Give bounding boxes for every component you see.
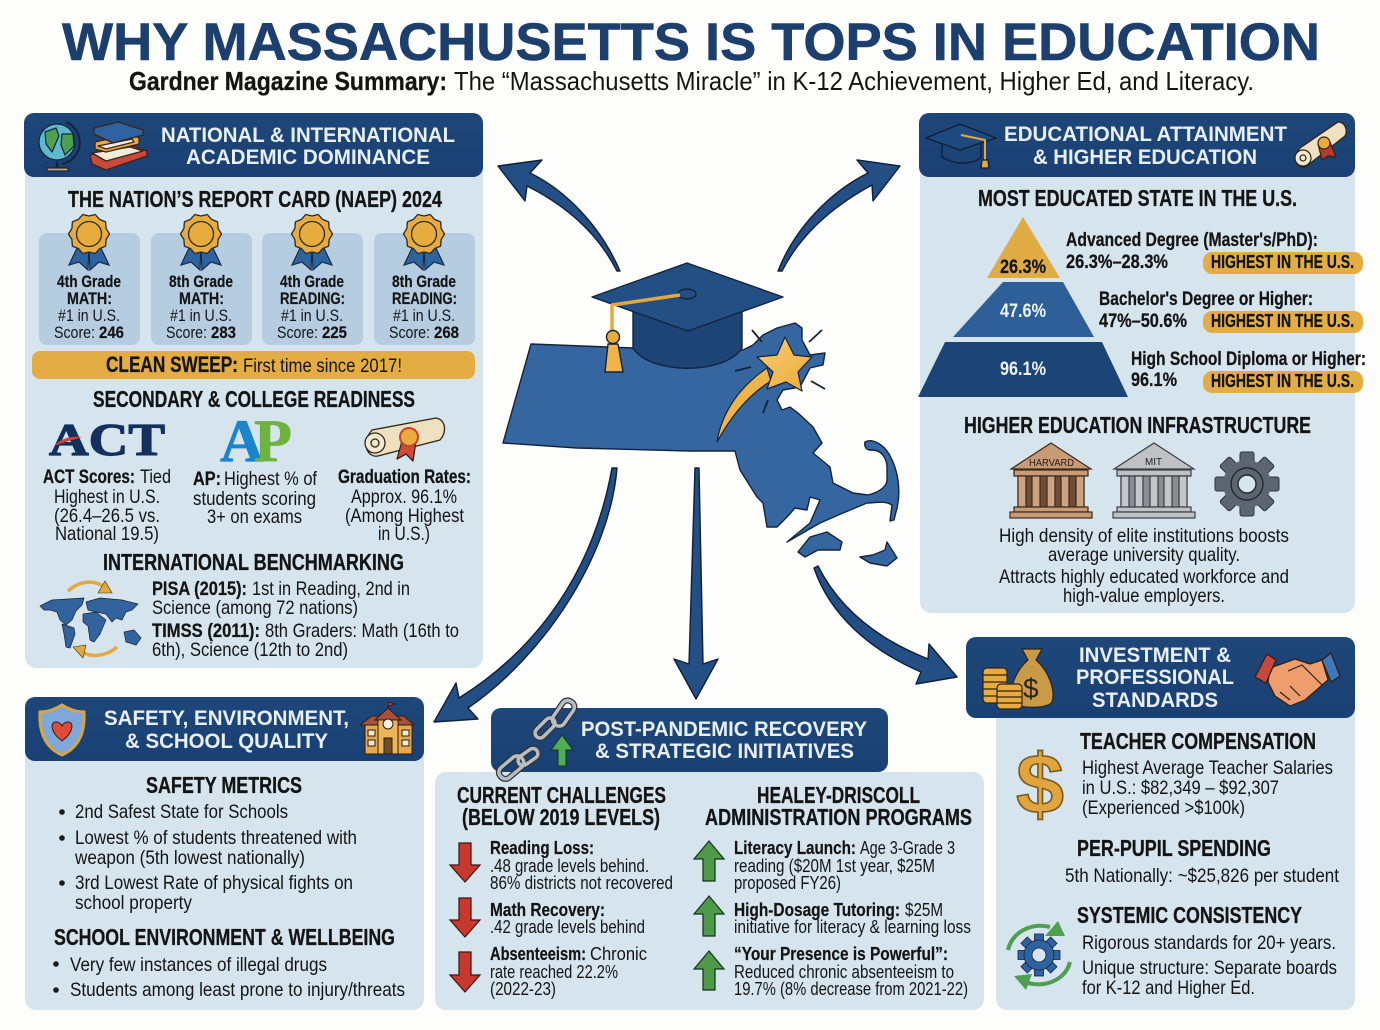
- icon: gold star with tail: [717, 330, 825, 442]
- text: ACT scores: [43, 466, 171, 545]
- text: PISA and TIMSS: Science (among 72 nations): [152, 597, 358, 619]
- panel header: INVESTMENT &: [1079, 644, 1231, 667]
- arrow: literacy launch: [694, 841, 724, 881]
- panel header: [919, 113, 1355, 177]
- label: advanced degree: [1066, 229, 1363, 274]
- block: per-pupil spending: [1065, 835, 1339, 887]
- text: PISA and TIMSS: [152, 578, 459, 661]
- arrow: to national panel: [498, 160, 620, 271]
- text: literacy launch: Age 3-Grade 3: [860, 838, 955, 858]
- label: high school diploma: 96.1%: [1131, 369, 1177, 391]
- arrow: presence: [694, 951, 724, 990]
- list: school environment: Very few instances of illegal drugs: [70, 954, 327, 976]
- callout: clean sweep: CLEAN SWEEP:: [106, 352, 238, 377]
- card: 8th grade reading: #1 in U.S.: [393, 306, 455, 325]
- text: reading loss: Reading Loss:: [490, 838, 594, 858]
- heading: most educated state: MOST EDUCATED STATE IN THE U.S.: [978, 185, 1297, 211]
- card: 8th grade reading: READING:: [392, 289, 457, 308]
- subtitle: [129, 66, 1254, 96]
- text: math recovery: Math Recovery:: [490, 900, 605, 920]
- card: 4th grade math: 4th Grade: [57, 272, 121, 291]
- arrow: to safety panel: [434, 468, 617, 722]
- panel header: [491, 708, 888, 772]
- text: your presence is powerful: 19.7% (8% decrease from 2021-22): [734, 979, 968, 999]
- column: current challenges: CURRENT CHALLENGES: [457, 782, 666, 808]
- text: math recovery: .42 grade levels behind: [490, 917, 645, 937]
- icon: AP logo: A: [220, 408, 264, 474]
- chart: attainment pyramid: [918, 217, 1128, 397]
- text: PISA and TIMSS: 1st in Reading, 2nd in: [252, 578, 410, 600]
- panel: investment and professional standards: [966, 637, 1355, 1010]
- text: absenteeism: (2022-23): [490, 979, 556, 999]
- text: infrastructure description: high-value employers.: [1063, 585, 1225, 607]
- text: ACT scores: National 19.5): [55, 523, 159, 545]
- card: 4th grade math: [39, 214, 140, 345]
- card: 8th grade math: MATH:: [179, 289, 224, 308]
- text: absenteeism: Chronic: [590, 944, 647, 964]
- icon: handshake: [1255, 653, 1340, 706]
- text: graduation rates: (Among Highest: [345, 505, 464, 527]
- text: AP: Highest % of: [224, 468, 317, 490]
- panel header: ACADEMIC DOMINANCE: [186, 146, 430, 169]
- text: tutoring: initiative for literacy & learning loss: [734, 917, 971, 937]
- heading: secondary and college readiness: SECONDARY & COLLEGE READINESS: [93, 386, 415, 412]
- card: 4th grade math: MATH:: [67, 289, 112, 308]
- block: teacher compensation: TEACHER COMPENSATION: [1080, 728, 1316, 754]
- text: your presence is powerful: [734, 944, 968, 999]
- text: your presence is powerful: “Your Presence is Powerful”:: [734, 944, 948, 964]
- arrow: to investment panel: [814, 566, 957, 684]
- text: AP: [193, 468, 317, 528]
- panel header: NATIONAL & INTERNATIONAL: [161, 124, 455, 147]
- text: literacy launch: Literacy Launch:: [734, 838, 856, 858]
- list: school environment: [53, 954, 405, 1001]
- icon: Harvard building: HARVARD: [1029, 457, 1074, 469]
- list: safety metrics: 3rd Lowest Rate of physical fights on: [75, 872, 353, 894]
- icon: MIT building: MIT: [1145, 456, 1163, 468]
- arrow: to attainment panel: [778, 160, 900, 271]
- block: per-pupil spending: PER-PUPIL SPENDING: [1077, 835, 1271, 861]
- icon: ACT logo: ACT: [49, 414, 165, 465]
- icon: cap: [926, 124, 996, 168]
- icon: diploma scroll: [365, 418, 445, 461]
- text: tutoring: High-Dosage Tutoring:: [734, 900, 900, 920]
- icon: gear: [1215, 452, 1279, 516]
- text: PISA and TIMSS: PISA (2015):: [152, 578, 247, 600]
- heading: NAEP: THE NATION’S REPORT CARD (NAEP) 2024: [68, 186, 442, 212]
- icon: broken chain with arrow: [496, 698, 577, 781]
- text: tutoring: $25M: [905, 900, 943, 920]
- text: reading loss: .48 grade levels behind.: [490, 856, 649, 876]
- panel header: & SCHOOL QUALITY: [125, 730, 328, 753]
- heading: safety metrics: SAFETY METRICS: [146, 772, 302, 798]
- text: reading loss: 86% districts not recovered: [490, 873, 673, 893]
- subtitle: Gardner Magazine Summary:: [129, 66, 447, 96]
- text: PISA and TIMSS: TIMSS (2011):: [152, 620, 260, 642]
- card: 8th grade reading: 8th Grade: [392, 272, 456, 291]
- text: ACT scores: Tied: [140, 466, 171, 488]
- panel header: [966, 637, 1355, 718]
- icon: Massachusetts map: [503, 323, 899, 566]
- text: graduation rates: Graduation Rates:: [338, 466, 471, 488]
- panel: safety, environment and school quality: [25, 697, 424, 1010]
- block: teacher compensation: [1080, 728, 1333, 819]
- card: 4th grade reading: [262, 214, 363, 345]
- card: 4th grade reading: #1 in U.S.: [281, 306, 343, 325]
- text: ACT scores: ACT Scores:: [43, 466, 135, 488]
- text: infrastructure description: Attracts highly educated workforce and: [999, 566, 1289, 588]
- heading: school environment: SCHOOL ENVIRONMENT & WELLBEING: [54, 924, 395, 950]
- text: literacy launch: proposed FY26): [734, 873, 841, 893]
- icon: shield with heart: [40, 705, 84, 755]
- text: infrastructure description: High density of elite institutions boosts: [999, 525, 1289, 547]
- block: teacher compensation: in U.S.: $82,349 – $92,307: [1082, 777, 1279, 799]
- panel header: EDUCATIONAL ATTAINMENT: [1004, 123, 1287, 146]
- text: AP: 3+ on exams: [207, 506, 302, 528]
- block: per-pupil spending: 5th Nationally: ~$25,826 per student: [1065, 865, 1339, 887]
- block: systemic consistency: Unique structure: Separate boards: [1082, 957, 1337, 979]
- icon: money bag and coins: [983, 649, 1053, 709]
- card: 8th grade math: Score:: [166, 323, 207, 342]
- panel: educational attainment and higher education: [918, 113, 1366, 613]
- label: advanced degree: 26.3%–28.3%: [1066, 251, 1168, 273]
- arrow: absenteeism: [450, 952, 480, 992]
- text: literacy launch: reading ($20M 1st year, $25M: [734, 856, 935, 876]
- label: advanced degree: Advanced Degree (Master's/PhD):: [1066, 229, 1318, 251]
- chart: attainment pyramid: 26.3%: [1000, 256, 1046, 278]
- block: teacher compensation: Highest Average Teacher Salaries: [1082, 757, 1333, 779]
- card: 8th grade math: 283: [211, 323, 236, 342]
- panel header: & HIGHER EDUCATION: [1033, 146, 1257, 169]
- subtitle: The “Massachusetts Miracle” in K-12 Achievement, Higher Ed, and Literacy.: [454, 66, 1254, 96]
- chart: attainment pyramid: 96.1%: [1000, 358, 1046, 380]
- column: Healey-Driscoll programs: ADMINISTRATION PROGRAMS: [705, 804, 972, 830]
- column: current challenges: (BELOW 2019 LEVELS): [462, 804, 660, 830]
- text: absenteeism: Absenteeism:: [490, 944, 586, 964]
- icon: Harvard building: [1010, 443, 1092, 518]
- panel header: POST-PANDEMIC RECOVERY: [581, 718, 867, 741]
- panel header: [25, 697, 424, 761]
- block: teacher compensation: (Experienced >$100k): [1082, 797, 1245, 819]
- text: PISA and TIMSS: 8th Graders: Math (16th to: [265, 620, 459, 642]
- arrow: math: [450, 898, 480, 937]
- text: AP: AP:: [193, 468, 221, 490]
- text: PISA and TIMSS: 6th), Science (12th to 2nd): [152, 639, 348, 661]
- list: safety metrics: [59, 801, 357, 914]
- panel header: [24, 113, 483, 177]
- list: safety metrics: 2nd Safest State for Schools: [75, 801, 288, 823]
- list: school environment: Students among least prone to injury/threats: [70, 979, 405, 1001]
- icon: scroll: [1295, 122, 1346, 167]
- card: 8th grade math: [151, 214, 252, 345]
- block: systemic consistency: for K-12 and Higher Ed.: [1082, 977, 1255, 999]
- column: Healey-Driscoll programs: HEALEY-DRISCOLL: [757, 782, 920, 808]
- arrow: tutoring: [694, 896, 724, 936]
- panel header: STANDARDS: [1092, 689, 1218, 712]
- text: absenteeism: rate reached 22.2%: [490, 962, 618, 982]
- card: 8th grade reading: Score:: [389, 323, 430, 342]
- text: math recovery: [490, 900, 645, 937]
- central illustration: Massachusetts map with cap and star: [503, 263, 899, 566]
- card: 4th grade reading: 225: [322, 323, 347, 342]
- block: systemic consistency: SYSTEMIC CONSISTENCY: [1077, 902, 1302, 928]
- list: safety metrics: Lowest % of students threatened with: [75, 827, 357, 849]
- text: AP: students scoring: [193, 488, 316, 510]
- label: bachelor's degree: [1099, 288, 1363, 333]
- block: systemic consistency: Rigorous standards for 20+ years.: [1082, 932, 1336, 954]
- label: high school diploma: [1131, 348, 1366, 393]
- column: current challenges: [450, 782, 673, 999]
- card: 8th grade math: #1 in U.S.: [170, 306, 232, 325]
- panel: post-pandemic recovery and strategic initiatives: [435, 698, 984, 1010]
- panel header: & STRATEGIC INITIATIVES: [595, 740, 854, 763]
- text: graduation rates: Approx. 96.1%: [351, 486, 457, 508]
- card: 4th grade reading: 4th Grade: [280, 272, 344, 291]
- icon: graduation cap: [592, 263, 783, 372]
- callout: clean sweep: [32, 351, 475, 379]
- panel header: PROFESSIONAL: [1076, 666, 1234, 689]
- icon: school building: [360, 702, 414, 754]
- text: tutoring: [734, 900, 971, 937]
- card: 4th grade math: Score:: [54, 323, 95, 342]
- card: 4th grade math: 246: [99, 323, 124, 342]
- panel header: SAFETY, ENVIRONMENT,: [104, 707, 349, 730]
- column: Healey-Driscoll programs: [694, 782, 972, 999]
- arrow: reading loss: [450, 843, 480, 882]
- icon: money bag and coins: $: [1023, 673, 1039, 704]
- icon: globe: [39, 122, 80, 171]
- label: bachelor's degree: Bachelor's Degree or Higher:: [1099, 288, 1313, 310]
- panel: national and international academic dominance: [24, 113, 483, 668]
- list: safety metrics: weapon (5th lowest nationally): [74, 847, 305, 869]
- label: bachelor's degree: 47%–50.6%: [1099, 310, 1187, 332]
- card: 4th grade math: #1 in U.S.: [58, 306, 120, 325]
- icon: books: [90, 122, 147, 170]
- text: infrastructure description: average university quality.: [1048, 544, 1240, 566]
- text: ACT scores: Highest in U.S.: [54, 486, 160, 508]
- text: reading loss: [490, 838, 673, 893]
- text: ACT scores: (26.4–26.5 vs.: [54, 505, 160, 527]
- text: literacy launch: [734, 838, 955, 893]
- icon: MIT building: [1113, 443, 1195, 518]
- icon: world map with arrows: [40, 581, 141, 658]
- card: 8th grade math: 8th Grade: [169, 272, 233, 291]
- icon: dollar sign: $: [1016, 737, 1064, 831]
- card: 4th grade reading: READING:: [280, 289, 345, 308]
- block: systemic consistency: [1077, 902, 1337, 999]
- text: your presence is powerful: Reduced chronic absenteeism to: [734, 962, 954, 982]
- icon: AP logo: P: [254, 408, 292, 474]
- icon: gear with cycle arrows: [1008, 921, 1070, 990]
- text: graduation rates: in U.S.): [378, 523, 430, 545]
- chart: attainment pyramid: 47.6%: [1000, 300, 1046, 322]
- callout: clean sweep: First time since 2017!: [243, 355, 402, 377]
- card: 8th grade reading: [374, 214, 475, 345]
- heading: international benchmarking: INTERNATIONAL BENCHMARKING: [103, 549, 404, 575]
- card: 4th grade reading: Score:: [277, 323, 318, 342]
- card: 8th grade reading: 268: [434, 323, 459, 342]
- list: safety metrics: school property: [75, 892, 192, 914]
- text: absenteeism: [490, 944, 647, 999]
- title: WHY MASSACHUSETTS IS TOPS IN EDUCATION: [62, 13, 1320, 72]
- text: graduation rates: [338, 466, 471, 545]
- text: infrastructure description: [999, 525, 1289, 607]
- icon: AP logo: [220, 408, 292, 474]
- arrow: to recovery panel: [674, 468, 718, 699]
